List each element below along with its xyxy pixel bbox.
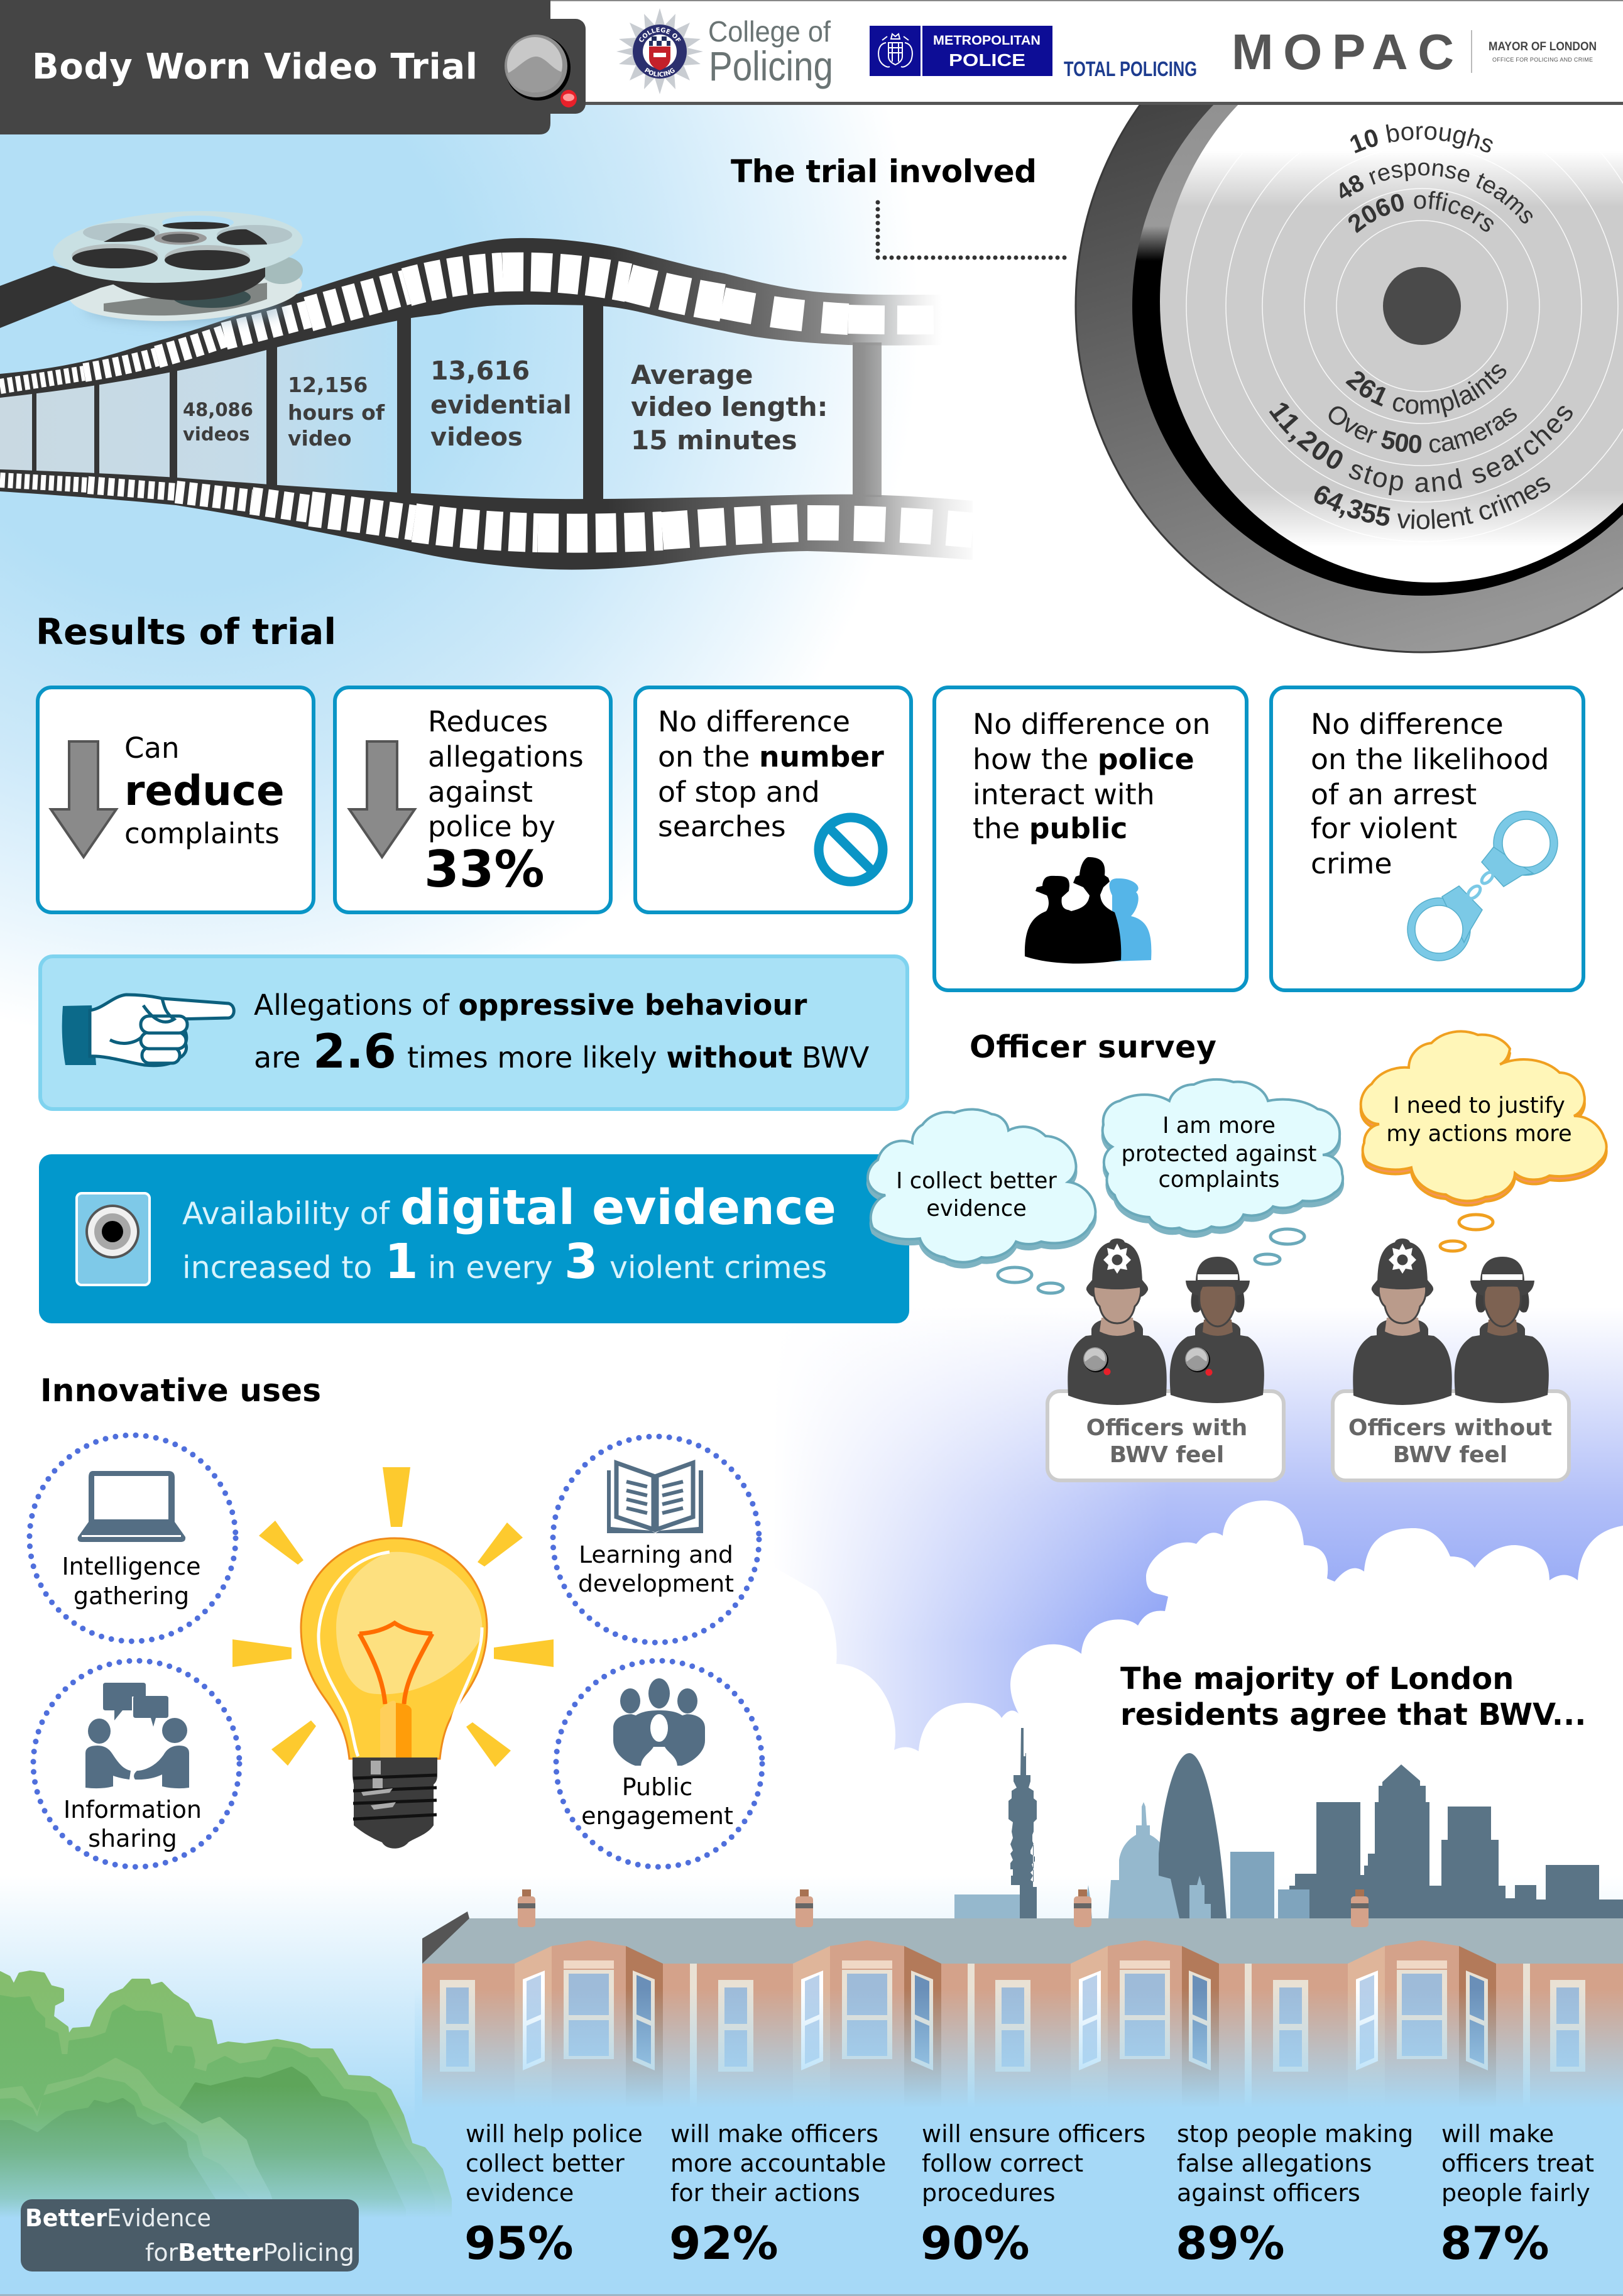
icon: down arrow: [51, 741, 116, 857]
logo: Better Evidence for Better Policing: forBetterPolicing: [145, 2239, 354, 2266]
callout text: times more likely without BWV: [407, 1041, 870, 1074]
stat: better evidence: collect better: [466, 2150, 625, 2177]
icon: handshake and speech: [85, 1683, 189, 1788]
film stats: 13,616: [430, 356, 530, 386]
heading: results of trial: Results of trial: [36, 611, 336, 653]
stat: treat people fairly: 87%: [1440, 2217, 1549, 2270]
reel facts: 261 complaints: [1345, 364, 1507, 417]
film stats: 48,086: [183, 399, 253, 420]
logo: College of Policing: College of: [708, 15, 831, 48]
sprocket holes: [0, 272, 973, 533]
logo: Total Policing: TOTAL POLICING: [1064, 57, 1197, 80]
thought cloud: protected against complaints: [1103, 1080, 1343, 1264]
card text: Reduces: [428, 705, 548, 738]
label: officers without BWV: Officers without: [1348, 1415, 1552, 1441]
film stats: [183, 356, 828, 456]
use: information sharing: [33, 1661, 239, 1867]
logo: Metropolitan Police: POLICE: [949, 50, 1025, 70]
card text: [658, 705, 884, 843]
logo: College of Policing: COLLEGE OF: [639, 28, 681, 42]
officers with body cameras: [1068, 1238, 1264, 1405]
stat: false allegations: 89%: [1176, 2217, 1285, 2270]
stat: accountable: more accountable: [670, 2150, 886, 2177]
use: learning and development: development: [578, 1570, 734, 1597]
callout text: Allegations of oppressive behaviour: [254, 988, 807, 1022]
stat: better evidence: will help police: [466, 2120, 643, 2148]
card text: police by: [428, 810, 555, 843]
callout text: [254, 988, 870, 1079]
film ribbon from reel: [0, 266, 119, 328]
callout text: Availability of: [182, 1196, 391, 1232]
thought cloud: justify actions: my actions more: [1386, 1121, 1572, 1147]
card text: against: [428, 775, 533, 809]
callout text: 2.6: [313, 1024, 396, 1079]
film stats: video length:: [631, 391, 828, 422]
stat: false allegations: stop people making: [1177, 2120, 1413, 2148]
bottom sky gradient: [0, 1876, 1623, 2121]
heading: innovative uses: Innovative uses: [40, 1372, 321, 1409]
reel facts: 64,355 violent crimes: [1314, 478, 1551, 529]
logo: Better Evidence for Better Policing: BetterEvidence: [25, 2204, 211, 2232]
film stats: Average: [631, 359, 753, 390]
officers without body cameras: [1353, 1238, 1549, 1405]
thought cloud: better evidence: evidence: [926, 1196, 1027, 1222]
title plate: [0, 0, 586, 134]
card text: Can: [124, 731, 180, 765]
label: officers with BWV: BWV feel: [1110, 1442, 1224, 1468]
flat windows: [440, 1980, 1585, 2072]
stat: correct procedures: follow correct: [922, 2150, 1083, 2177]
London skyline: [954, 1728, 1623, 1918]
stat: false allegations: against officers: [1177, 2179, 1360, 2207]
card text: No difference on: [973, 707, 1210, 741]
use: intelligence gathering: Intelligence: [62, 1553, 201, 1580]
card text: searches: [658, 810, 786, 843]
logo: Metropolitan Police: METROPOLITAN: [933, 33, 1041, 48]
trees: [0, 1972, 450, 2218]
card text: [973, 707, 1210, 845]
heading: London residents: [1120, 1662, 1586, 1732]
logo: College of Policing: POLICING: [645, 68, 675, 77]
light bulb: [232, 1467, 554, 1849]
card text: No difference: [658, 705, 850, 738]
film stats: videos: [430, 423, 523, 452]
light rays: [232, 1467, 554, 1767]
icon: group of people: [613, 1678, 705, 1767]
logo: Better Evidence for Better Policing: [21, 2199, 359, 2271]
reel facts: [1269, 124, 1573, 529]
card text: of an arrest: [1311, 777, 1477, 811]
card text: 33%: [424, 840, 544, 899]
small film reel: [0, 205, 305, 328]
icon: people: [1025, 857, 1151, 964]
bay windows: [515, 1940, 1496, 2111]
terraced building: [415, 1889, 1623, 2121]
thought cloud: justify actions: I need to justify: [1393, 1093, 1565, 1118]
film stats: hours of: [288, 400, 385, 425]
card: number of stop and searches: [635, 687, 911, 912]
glass: [301, 1538, 487, 1759]
film coil: [102, 264, 265, 300]
reel facts: 48 response teams: [1340, 162, 1533, 224]
lower reel plate: [67, 254, 303, 327]
callout text: 3: [564, 1234, 598, 1290]
gable edge: [422, 1911, 469, 1964]
icon: open book: [607, 1463, 703, 1533]
logo: MOPAC: MOPAC: [1232, 24, 1454, 80]
card text: complaints: [124, 817, 280, 850]
reel hub: [1383, 267, 1461, 345]
thought cloud: protected against complaints: I am more: [1162, 1113, 1276, 1139]
card text: for violent: [1311, 811, 1457, 845]
stat: accountable: 92%: [669, 2217, 779, 2270]
card: reduces allegations: [335, 687, 611, 912]
filament: [359, 1623, 432, 1704]
skyline: dark towers: [1289, 1764, 1623, 1918]
film stats: videos: [183, 424, 249, 445]
logo: MOPAC: MAYOR OF LONDON: [1489, 40, 1597, 53]
thought cloud: better evidence: [868, 1109, 1095, 1293]
stem: [380, 1701, 396, 1758]
callout text: 1: [385, 1234, 418, 1290]
frame tint: [0, 318, 402, 493]
thought cloud: protected against complaints: complaints: [1158, 1167, 1280, 1193]
card text: allegations: [428, 740, 584, 774]
label: officers with BWV: Officers with: [1086, 1415, 1247, 1441]
use: public engagement: engagement: [581, 1802, 733, 1830]
thought cloud: justify actions: [1361, 1031, 1607, 1251]
logo: Metropolitan Police: [870, 26, 1052, 76]
logo: College of Policing: [617, 9, 833, 94]
stat: treat people fairly: [1440, 2120, 1594, 2270]
card text: [1311, 707, 1549, 880]
film stats: video: [288, 426, 352, 451]
thought cloud: better evidence: I collect better: [896, 1168, 1057, 1194]
thought cloud: protected against complaints: protected against: [1122, 1141, 1316, 1167]
use: information sharing: sharing: [88, 1825, 177, 1852]
stat: better evidence: [464, 2120, 643, 2270]
top film band: [0, 238, 943, 398]
logo: College of Policing: Policing: [709, 43, 833, 89]
dotted connector: [878, 202, 1065, 258]
skyline: BT tower: [1008, 1728, 1037, 1918]
use: learning and development: [553, 1436, 759, 1643]
screw base: [352, 1758, 437, 1849]
stat: correct procedures: will ensure officers: [922, 2120, 1145, 2148]
big film reel: [1074, 105, 1623, 653]
stat: correct procedures: procedures: [922, 2179, 1056, 2207]
use: public engagement: [556, 1661, 762, 1867]
callout text: [182, 1180, 836, 1290]
film stats: evidential: [430, 391, 572, 420]
icon: down arrow: [349, 741, 415, 857]
icon: pointing hand: [62, 995, 234, 1066]
card text: [124, 731, 285, 850]
card text: on the likelihood: [1311, 742, 1549, 776]
callout text: digital evidence: [400, 1180, 836, 1236]
stat: accountable: will make officers: [670, 2120, 878, 2148]
card: police interact with the public: [934, 687, 1247, 990]
logo: MOPAC: [1232, 24, 1597, 80]
card text: on the number: [658, 740, 884, 774]
heading: the trial involved: The trial involved: [731, 153, 1037, 190]
stat: false allegations: [1176, 2120, 1413, 2270]
icon: handcuffs: [1407, 811, 1558, 961]
card: arrest for violent crime: [1271, 687, 1583, 990]
chimneys: [518, 1889, 1369, 1927]
callout text: in every: [428, 1250, 553, 1286]
skyline: light buildings: [954, 1802, 1179, 1918]
stat: accountable: for their actions: [670, 2179, 860, 2207]
icon: body camera: [77, 1193, 150, 1285]
reel facts: 2060 officers: [1348, 191, 1494, 233]
icon: no symbol: [819, 817, 883, 882]
reel facts: 11,200 stop and searches: [1269, 402, 1573, 495]
stat: accountable: [669, 2120, 886, 2270]
use: public engagement: Public: [622, 1773, 692, 1801]
callout text: increased to: [182, 1250, 372, 1286]
heading: London residents: residents agree that BWV...: [1120, 1698, 1586, 1732]
stat: treat people fairly: people fairly: [1441, 2179, 1590, 2207]
stat: treat people fairly: officers treat: [1441, 2150, 1594, 2177]
icon: laptop: [78, 1471, 185, 1542]
cloud: [748, 1501, 1623, 1898]
stat: better evidence: 95%: [464, 2217, 574, 2270]
bottom film band: [0, 469, 973, 570]
stat: correct procedures: 90%: [921, 2217, 1030, 2270]
heading: London residents: The majority of London: [1120, 1662, 1514, 1697]
skyline: gherkin: [1159, 1753, 1227, 1918]
callout text: are: [254, 1041, 300, 1074]
reel facts: 10 boroughs: [1350, 124, 1493, 153]
top reel plate: [51, 205, 305, 289]
stat: correct procedures: [921, 2120, 1145, 2270]
frame dividers: [32, 304, 882, 501]
card text: [424, 705, 584, 899]
stat: false allegations: false allegations: [1177, 2150, 1372, 2177]
film stats: 12,156: [288, 373, 368, 397]
card: can reduce complaints: [38, 687, 314, 912]
use: learning and development: Learning and: [579, 1541, 733, 1568]
card text: No difference: [1311, 707, 1504, 741]
callout: oppressive behaviour: [40, 956, 907, 1109]
card text: how the police: [973, 742, 1194, 776]
card text: the public: [973, 811, 1127, 845]
use: intelligence gathering: [30, 1435, 236, 1641]
label: officers without BWV: [1333, 1391, 1569, 1480]
wall: [422, 1964, 1623, 2114]
label: officers without BWV: BWV feel: [1393, 1442, 1507, 1468]
card text: interact with: [973, 777, 1155, 811]
title: Body Worn Video Trial: [32, 46, 478, 87]
card text: reduce: [124, 767, 285, 815]
stat: treat people fairly: will make: [1441, 2120, 1554, 2148]
film stats: 15 minutes: [631, 425, 797, 456]
film strip: [0, 238, 973, 570]
fade: [415, 1989, 1623, 2108]
roof: [422, 1918, 1623, 1964]
icon: camera lens: [505, 35, 577, 107]
callout text: violent crimes: [609, 1250, 827, 1286]
logo: MOPAC: OFFICE FOR POLICING AND CRIME: [1492, 57, 1593, 63]
use: intelligence gathering: gathering: [74, 1582, 189, 1610]
heading: officer survey: Officer survey: [970, 1029, 1216, 1065]
use: information sharing: Information: [63, 1796, 202, 1823]
card text: of stop and: [658, 775, 820, 809]
reel facts: Over 500 cameras: [1328, 406, 1517, 454]
card text: crime: [1311, 846, 1392, 880]
header logo bar: [550, 0, 1623, 105]
label: officers with BWV: [1047, 1391, 1284, 1480]
callout: digital evidence: [39, 1154, 909, 1323]
stat: better evidence: evidence: [466, 2179, 574, 2207]
